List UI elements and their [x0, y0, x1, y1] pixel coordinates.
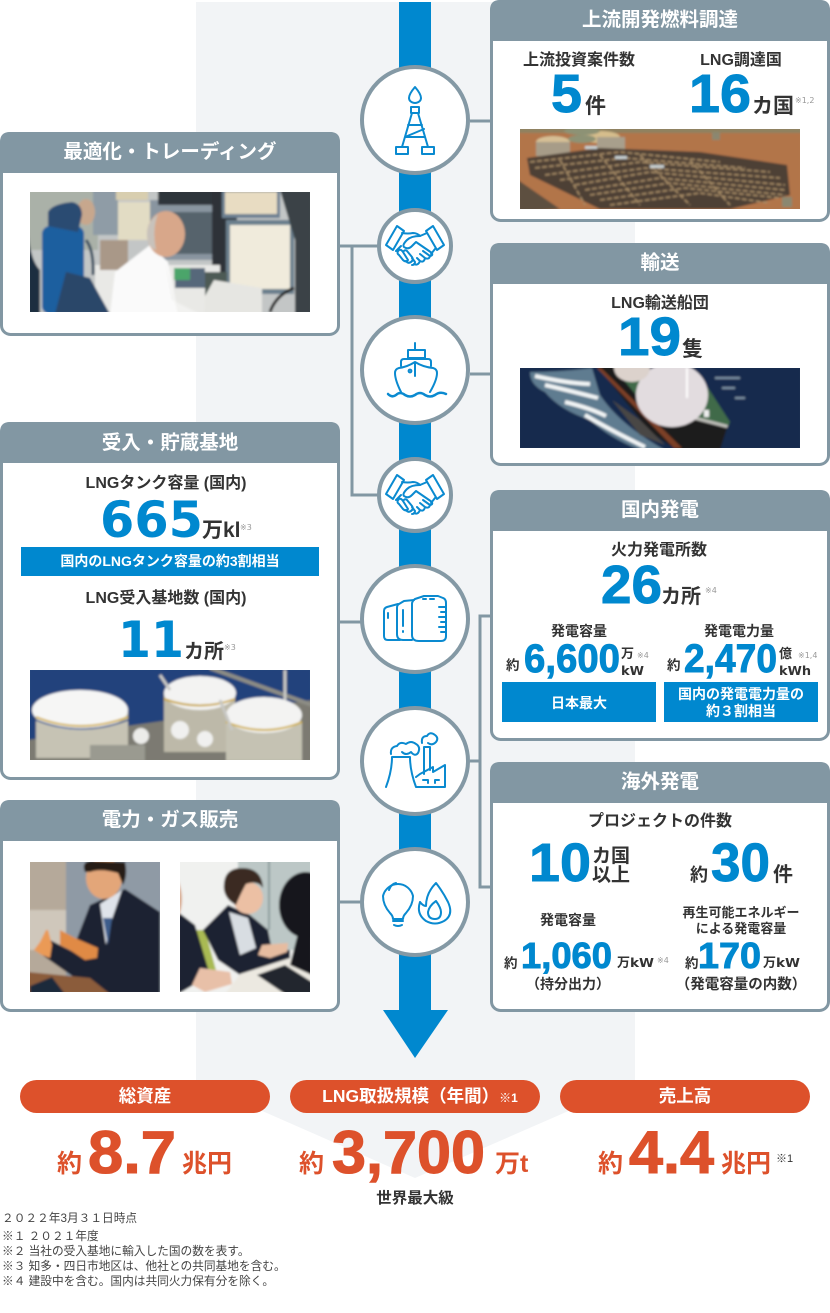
- footnotes: ※３ 知多・四日市地区は、他社との共同基地を含む。: [2, 1259, 286, 1273]
- stat: LNG procurement countries: ※1,2: [795, 96, 814, 105]
- panel: optimisation and trading: [0, 132, 340, 334]
- stat: overseas capacity: ※4: [657, 956, 669, 965]
- photo: businessman: [28, 857, 162, 994]
- stat: LNG procurement countries: 16: [689, 64, 751, 124]
- panel header: [490, 490, 830, 531]
- stat: electricity generated: 億: [779, 646, 792, 661]
- text: number of projects: プロジェクトの件数: [588, 812, 732, 830]
- stat: renewable capacity: [676, 905, 806, 993]
- panel: transport: [490, 243, 830, 464]
- stat: thermal power plants: カ所: [661, 585, 701, 608]
- stat: generating capacity: ※4: [637, 651, 649, 660]
- stat: upstream investment projects: [523, 50, 635, 124]
- stat: LNG fleet: 19: [618, 307, 681, 367]
- stat: generating capacity: [506, 623, 649, 681]
- stat: thermal power plants: [601, 541, 717, 615]
- panel header: 輸送: [640, 252, 680, 274]
- panel header: 国内発電: [621, 499, 699, 521]
- stat: electricity generated: 発電電力量: [704, 623, 774, 639]
- stat: LNG tank capacity: 万kl: [202, 519, 241, 542]
- callout: share of domestic generation: 約３割相当: [706, 703, 776, 719]
- kpi: total assets: 総資産: [119, 1086, 171, 1106]
- stat: projects: [690, 833, 793, 893]
- stat: countries: 以上: [592, 864, 630, 886]
- kpi: LNG handling volume: 3,700: [332, 1119, 485, 1186]
- panel header: [0, 132, 340, 173]
- icon circle: ship: [362, 317, 468, 423]
- kpi: total assets: [20, 1080, 270, 1186]
- icon circle: gas rig: [362, 67, 468, 173]
- stat: renewable capacity: （発電容量の内数）: [676, 975, 806, 993]
- photo: trading floor: [28, 190, 312, 315]
- panel: power and gas sales: [0, 800, 340, 1010]
- background band: [196, 2, 635, 1178]
- stat: thermal power plants: ※4: [705, 586, 717, 595]
- panel header: 最適化・トレーディング: [63, 140, 277, 163]
- stat: generating capacity: kW: [621, 663, 644, 678]
- panel header: [490, 762, 830, 803]
- footnotes: ２０２２年3月３１日時点: [2, 1211, 137, 1225]
- panel header: [490, 0, 830, 41]
- stat: renewable capacity: 170: [698, 935, 761, 976]
- panel header: 上流開発燃料調達: [582, 9, 738, 31]
- stat: projects: 30: [711, 833, 770, 893]
- panel: receiving and storage terminals: [0, 422, 340, 778]
- photo: storage tanks: [28, 668, 312, 762]
- stat: overseas capacity: （持分出力）: [526, 976, 610, 992]
- stat: LNG tank capacity: [86, 473, 252, 549]
- stat: overseas capacity: kW: [630, 955, 654, 970]
- stat: overseas capacity: 約: [504, 955, 518, 971]
- callout: share of domestic tank capacity: [21, 547, 319, 576]
- kpi: LNG handling volume: 万t: [495, 1150, 529, 1178]
- stat: overseas capacity: [504, 912, 669, 992]
- panel: upstream development and fuel procurement: [490, 0, 830, 220]
- stat: LNG procurement countries: カ国: [752, 95, 794, 118]
- stat: thermal power plants: 火力発電所数: [611, 541, 707, 559]
- callout: share of domestic tank capacity: 国内のLNGタンク容量の約3割相当: [60, 553, 280, 569]
- icon circle: handshake (receiving): [379, 459, 451, 531]
- panel header: 電力・ガス販売: [102, 809, 238, 831]
- stat: electricity generated: 約: [667, 657, 680, 673]
- kpi: LNG handling volume: 世界最大級: [376, 1189, 454, 1207]
- stat: overseas capacity: 発電容量: [540, 912, 596, 928]
- kpi: total assets: 8.7: [88, 1119, 176, 1186]
- stat: overseas capacity: 万: [617, 955, 630, 970]
- stat: electricity generated: 2,470: [684, 637, 777, 681]
- footnotes: ※２ 当社の受入基地に輸入した国の数を表す。: [2, 1244, 250, 1258]
- stat: LNG tank capacity: ※3: [240, 523, 252, 532]
- kpi: total assets: 兆円: [182, 1150, 232, 1178]
- stat: projects: 件: [773, 863, 793, 886]
- kpi: revenue: 売上高: [659, 1086, 711, 1106]
- kpi: LNG handling volume: [290, 1080, 540, 1207]
- stat: receiving terminals: [86, 588, 246, 669]
- callout: share of domestic generation: [664, 682, 818, 722]
- icon circle: power plant: [362, 708, 468, 814]
- stat: generating capacity: 発電容量: [551, 623, 607, 639]
- connector lines: [340, 121, 490, 902]
- stat: renewable capacity: kW: [776, 955, 800, 970]
- stat: countries: カ国: [592, 845, 630, 867]
- icon circle: LNG tanks: [362, 566, 468, 672]
- kpi: total assets: 約: [57, 1150, 82, 1178]
- stat: upstream investment projects: 件: [585, 95, 606, 118]
- panel: overseas power generation: [490, 762, 830, 1010]
- panel header: 受入・貯蔵基地: [102, 431, 239, 454]
- panel: domestic power generation: [490, 490, 830, 740]
- stat: LNG fleet: 隻: [682, 338, 703, 361]
- stat: generating capacity: 6,600: [524, 637, 620, 681]
- stat: electricity generated: [667, 623, 817, 681]
- panel header: [0, 800, 340, 841]
- stat: electricity generated: kWh: [779, 663, 811, 678]
- callout: largest in Japan: [502, 682, 656, 722]
- stat: LNG procurement countries: [689, 51, 814, 124]
- stat: projects: 約: [690, 865, 708, 885]
- stat: countries: [529, 833, 630, 893]
- stat: LNG tank capacity: 665: [100, 491, 203, 549]
- icon circle: handshake (trading): [379, 210, 451, 282]
- kpi: revenue: 4.4: [629, 1119, 715, 1186]
- flow arrow: [383, 2, 448, 1058]
- stat: LNG tank capacity: LNGタンク容量 (国内): [86, 473, 246, 492]
- photo: LNG carrier: [520, 368, 800, 448]
- kpi: revenue: ※1: [776, 1153, 793, 1165]
- stat: renewable capacity: による発電容量: [696, 921, 786, 936]
- panel header: [490, 243, 830, 284]
- panel header: 海外発電: [621, 771, 699, 793]
- stat: generating capacity: 約: [506, 657, 520, 673]
- footnotes: [2, 1211, 286, 1288]
- kpi: revenue: [560, 1080, 810, 1186]
- stat: renewable capacity: 再生可能エネルギー: [682, 905, 800, 920]
- kpi: LNG handling volume: 約: [299, 1150, 324, 1178]
- stat: receiving terminals: 11: [118, 611, 184, 669]
- stat: receiving terminals: LNG受入基地数 (国内): [86, 588, 246, 607]
- icon circle: bulb and flame: [362, 849, 468, 955]
- footnotes: ※１ ２０２１年度: [2, 1229, 99, 1243]
- kpi: revenue: 兆円: [721, 1150, 771, 1178]
- stat: LNG fleet: LNG輸送船団: [611, 294, 709, 312]
- kpi: revenue: 約: [598, 1150, 623, 1178]
- stat: receiving terminals: カ所: [184, 640, 224, 663]
- stat: electricity generated: ※1,4: [798, 651, 817, 660]
- stat: receiving terminals: ※3: [224, 643, 236, 652]
- stat: countries: 10: [529, 833, 591, 893]
- stat: thermal power plants: 26: [601, 555, 662, 615]
- stat: upstream investment projects: 上流投資案件数: [523, 50, 635, 69]
- kpi: LNG handling volume: LNG取扱規模（年間）※1: [322, 1086, 518, 1106]
- stat: renewable capacity: 約: [685, 955, 698, 971]
- footnotes: ※４ 建設中を含む。国内は共同火力保有分を除く。: [2, 1274, 274, 1288]
- callout: largest in Japan: 日本最大: [551, 695, 607, 711]
- stat: LNG fleet: [611, 294, 709, 367]
- photo: businesswoman: [180, 862, 310, 992]
- panel header: [0, 422, 340, 463]
- stat: upstream investment projects: 5: [551, 64, 582, 124]
- stat: LNG procurement countries: LNG調達国: [700, 51, 782, 69]
- stat: overseas capacity: 1,060: [521, 935, 612, 976]
- callout: share of domestic generation: 国内の発電電力量の: [678, 686, 804, 702]
- stat: generating capacity: 万: [621, 646, 634, 661]
- photo: LNG plant: [518, 127, 802, 212]
- stat: renewable capacity: 万: [763, 955, 776, 970]
